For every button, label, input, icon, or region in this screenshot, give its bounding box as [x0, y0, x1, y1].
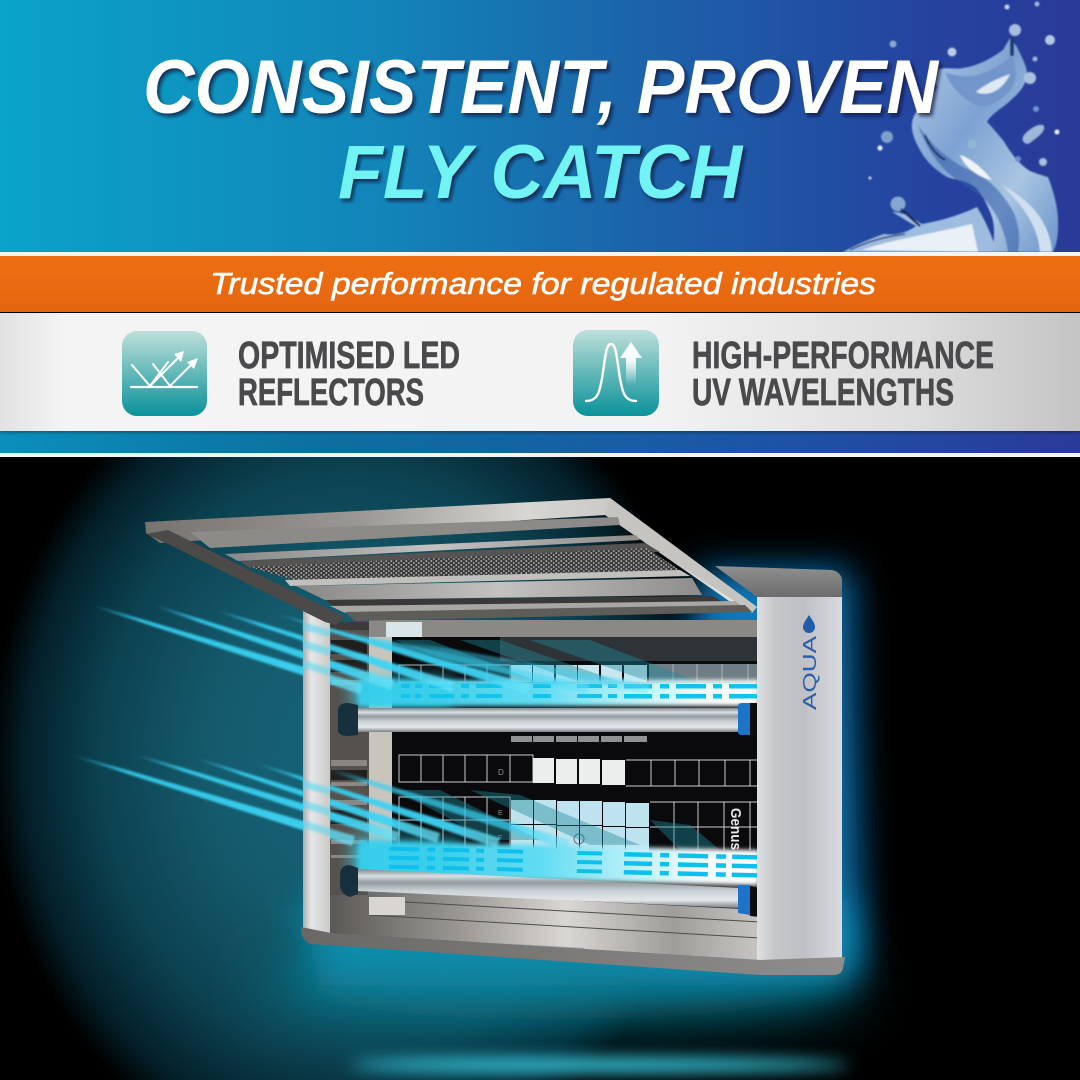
icon: drop logo	[803, 615, 815, 633]
grey bottom tray	[301, 927, 845, 975]
title line one: CONSISTENT, PROVEN	[143, 45, 940, 130]
left interior metal	[329, 630, 393, 930]
grid rows E and F: E	[498, 810, 503, 817]
Genus logo: Genus	[727, 808, 744, 850]
LED reflector plate top	[352, 678, 759, 708]
light rays top	[94, 605, 650, 694]
icon: LED reflector	[122, 331, 207, 416]
icon: water splash	[843, 2, 1060, 252]
orange tagline bar	[0, 256, 1080, 312]
white rule above product	[0, 453, 1080, 457]
grid rows E and F	[399, 797, 759, 853]
right column	[757, 597, 842, 961]
feature text: wavelengths	[692, 335, 994, 414]
panel: feature band	[0, 313, 1080, 431]
grid row A lower remnant	[511, 736, 647, 742]
feature text: reflectors	[238, 335, 460, 414]
AQUA logo: AQUA	[800, 636, 820, 710]
UV tube bottom	[340, 865, 760, 917]
interior back	[329, 622, 759, 938]
top steel strip	[369, 620, 759, 637]
teal shadow bands on board	[395, 640, 720, 850]
feature text: wavelengths: UV WAVELENGTHS	[692, 372, 954, 414]
left post	[303, 610, 330, 935]
rays over left post	[303, 622, 330, 836]
blue strip under features	[0, 428, 1080, 454]
tagline text: Trusted performance for regulated industries	[210, 266, 876, 301]
icon: UV wavelength	[573, 330, 659, 416]
UV tube top	[338, 703, 759, 736]
insect glue board	[392, 637, 759, 853]
grid row A	[399, 664, 759, 682]
floor glow	[350, 1058, 850, 1072]
bottom steel area	[329, 890, 759, 960]
product: fly trap unit	[75, 498, 845, 975]
panel: product scene background	[0, 457, 891, 1080]
grey top cap	[715, 566, 842, 597]
lid mesh	[250, 548, 684, 582]
feature text: reflectors: OPTIMISED LED	[238, 335, 460, 377]
lid frame	[145, 498, 757, 625]
feature text: reflectors: REFLECTORS	[238, 372, 424, 414]
grid row D	[399, 755, 759, 786]
header banner	[0, 0, 1080, 253]
white rule under header	[0, 252, 1080, 256]
grid rows E and F: F	[498, 835, 502, 842]
title line two: FLY CATCH	[338, 130, 744, 215]
LED reflector plate bottom	[352, 838, 759, 887]
light rays bottom	[75, 754, 570, 850]
grid row D: D	[498, 768, 504, 777]
